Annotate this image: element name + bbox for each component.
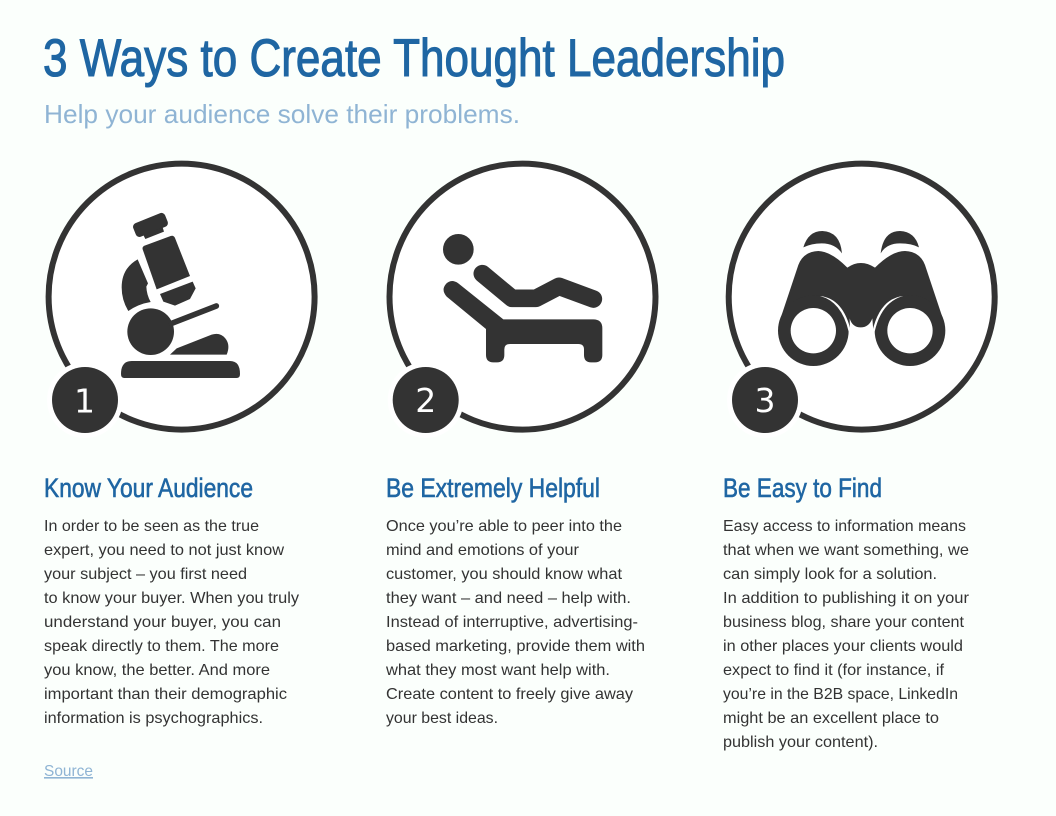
number badge 3: 3 — [754, 381, 776, 420]
text block: information is psychographics. — [44, 710, 263, 727]
text block: important than their demographic — [44, 686, 287, 703]
text block: you’re in the B2B space, LinkedIn — [723, 686, 958, 703]
panel: be extremely helpful — [385, 164, 656, 727]
text block: they want – and need – help with. — [386, 590, 631, 607]
number badge 2: 2 — [415, 381, 436, 420]
text block: can simply look for a solution. — [723, 566, 937, 583]
text block: understand your buyer, you can — [44, 614, 281, 631]
heading: Be Extremely Helpful — [386, 473, 600, 503]
heading: Be Easy to Find — [723, 473, 882, 503]
text block — [44, 518, 299, 727]
icon: person on lounge chair — [443, 234, 602, 362]
text block: Easy access to information means — [723, 518, 966, 535]
text block: publish your content). — [723, 734, 878, 751]
text block: to know your buyer. When you truly — [44, 590, 299, 607]
text block: might be an excellent place to — [723, 710, 939, 727]
number badge 1 — [47, 362, 123, 438]
text block: based marketing, provide them with — [386, 638, 645, 655]
text block: Once you’re able to peer into the — [386, 518, 622, 535]
text block: that when we want something, we — [723, 542, 969, 559]
text block: speak directly to them. The more — [44, 638, 279, 655]
text block: Instead of interruptive, advertising- — [386, 614, 638, 631]
panel: be easy to find — [723, 164, 995, 751]
icon: binoculars in circle — [727, 164, 995, 438]
title: 3 Ways to Create Thought Leadership — [43, 29, 785, 88]
icon: lounger in circle — [388, 164, 656, 438]
text block: In order to be seen as the true — [44, 518, 259, 535]
panel: know your audience — [44, 164, 315, 727]
text block: customer, you should know what — [386, 566, 623, 583]
icon: binoculars — [778, 231, 945, 366]
text block: mind and emotions of your — [386, 542, 580, 559]
text block — [723, 518, 970, 751]
icon: microscope in circle — [47, 164, 315, 438]
icon: microscope — [121, 212, 240, 378]
text block: your best ideas. — [386, 710, 498, 727]
text block: expect to find it (for instance, if — [723, 662, 945, 679]
number badge 2 — [388, 362, 464, 438]
heading: Know Your Audience — [44, 473, 253, 503]
number badge 1: 1 — [74, 382, 95, 420]
text block: what they most want help with. — [385, 662, 610, 679]
text block: In addition to publishing it on your — [723, 590, 970, 607]
text block: your subject – you first need — [44, 566, 247, 583]
text block: you know, the better. And more — [44, 662, 270, 679]
text block — [385, 518, 645, 727]
number badge 3 — [727, 362, 803, 438]
text block: Create content to freely give away — [386, 686, 633, 703]
source link: Source — [44, 763, 93, 780]
text block: in other places your clients would — [723, 638, 963, 655]
text block: business blog, share your content — [723, 614, 965, 631]
text block: expert, you need to not just know — [44, 542, 284, 559]
subtitle: Help your audience solve their problems. — [44, 99, 520, 129]
